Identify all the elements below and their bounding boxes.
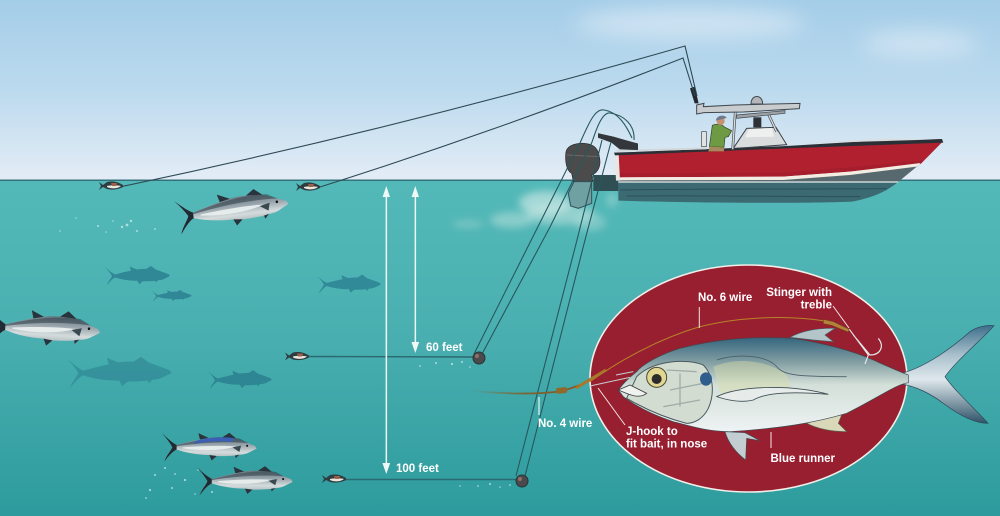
downrigger line and weight 100 feet <box>345 475 528 487</box>
body <box>618 338 908 432</box>
clouds <box>575 8 978 57</box>
kingfish top <box>174 185 291 235</box>
label: 100 feet: 100 feet <box>396 463 439 475</box>
shadow fish school <box>67 266 381 389</box>
belly fin <box>725 432 760 460</box>
bait fish surface 1 <box>99 181 123 190</box>
rigged blue runner <box>590 318 994 460</box>
surface lines to baits <box>122 46 697 187</box>
console <box>733 127 787 148</box>
bait inset oval <box>590 265 907 492</box>
angler <box>702 116 732 151</box>
wire lines to downriggers <box>474 110 634 476</box>
downrigger line and weight 60 feet <box>308 352 485 364</box>
leader: No. 4 wire <box>538 397 540 415</box>
label: 60 feet: 60 feet <box>426 342 463 354</box>
label: Blue runner: Blue runner <box>770 453 836 465</box>
label: Stinger with treble: Stinger with <box>766 287 832 299</box>
body yellow wash <box>713 361 793 393</box>
kingfish left <box>0 306 101 351</box>
shadow fish 1 <box>105 266 170 285</box>
grey boot stripe <box>618 165 918 183</box>
gill spot <box>700 372 712 386</box>
swim platform <box>593 175 618 191</box>
propeller foam <box>452 191 617 231</box>
sky background <box>0 0 1000 181</box>
white stripe <box>618 163 921 180</box>
bubbles <box>59 217 511 499</box>
anal fin <box>807 415 847 432</box>
No. 6 wire <box>590 318 825 382</box>
arrow: 100 feet depth <box>382 186 390 474</box>
T-top <box>697 103 800 114</box>
label: J-hook: fit bait, in nose <box>626 438 707 450</box>
callout leaders <box>598 306 849 448</box>
underwater hull <box>618 183 897 203</box>
label: No. 6 wire: No. 6 wire <box>698 292 752 304</box>
tail <box>902 326 994 423</box>
gunwale <box>614 139 943 155</box>
T-top posts <box>733 112 777 149</box>
bait fish surface 2 <box>296 182 320 191</box>
transom <box>615 154 620 181</box>
shadow fish 3 <box>317 275 381 294</box>
dorsal fin <box>790 328 835 342</box>
shadow fish 4 <box>67 357 172 388</box>
waterline <box>0 180 1000 181</box>
radar <box>751 96 763 104</box>
lateral line <box>717 356 847 377</box>
kingfish blue back <box>162 432 257 463</box>
rod holders <box>690 87 699 103</box>
label: Stinger with treble: treble <box>801 300 832 312</box>
crimp <box>823 319 849 332</box>
treble hook <box>849 329 881 364</box>
eye <box>647 367 667 387</box>
mouth <box>618 385 647 396</box>
motor leg <box>568 182 592 208</box>
J-hook <box>590 372 633 386</box>
outboard motor <box>566 143 600 182</box>
boat <box>566 87 943 208</box>
label: No. 4 wire: No. 4 wire <box>538 418 592 430</box>
gill plate <box>627 361 712 423</box>
shadow fish 5 <box>208 370 272 389</box>
pectoral fin <box>717 387 828 401</box>
outrigger <box>599 134 637 149</box>
wire leader to bait <box>472 370 606 394</box>
kingfish bottom <box>197 466 293 496</box>
seat shadow <box>753 117 761 127</box>
label: J-hook: J-hook to <box>626 426 678 438</box>
arrow: 60 feet depth <box>411 186 419 353</box>
red hull <box>617 142 943 177</box>
bait fish 100 feet <box>322 474 346 483</box>
shadow fish 2 <box>152 290 192 302</box>
bait fish 60 feet <box>285 352 309 360</box>
water background <box>0 180 1000 516</box>
